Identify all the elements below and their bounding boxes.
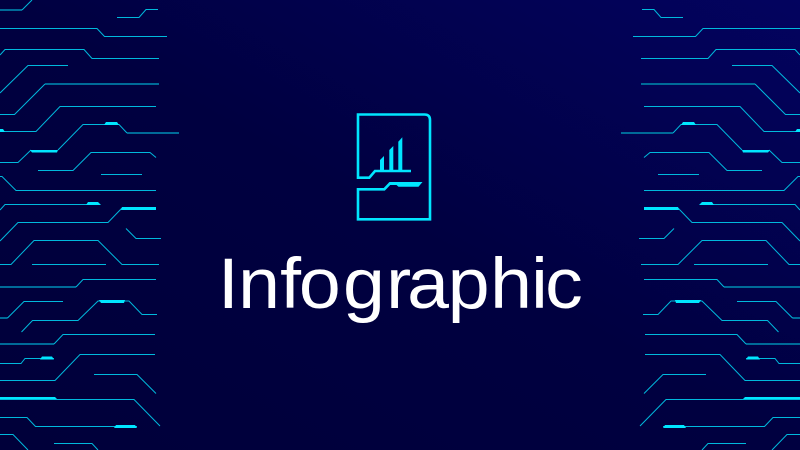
right circuit lines panel (621, 10, 800, 450)
title: Infographic (218, 244, 583, 324)
icon: document with bar chart (358, 114, 430, 219)
left circuit lines panel (0, 0, 179, 450)
